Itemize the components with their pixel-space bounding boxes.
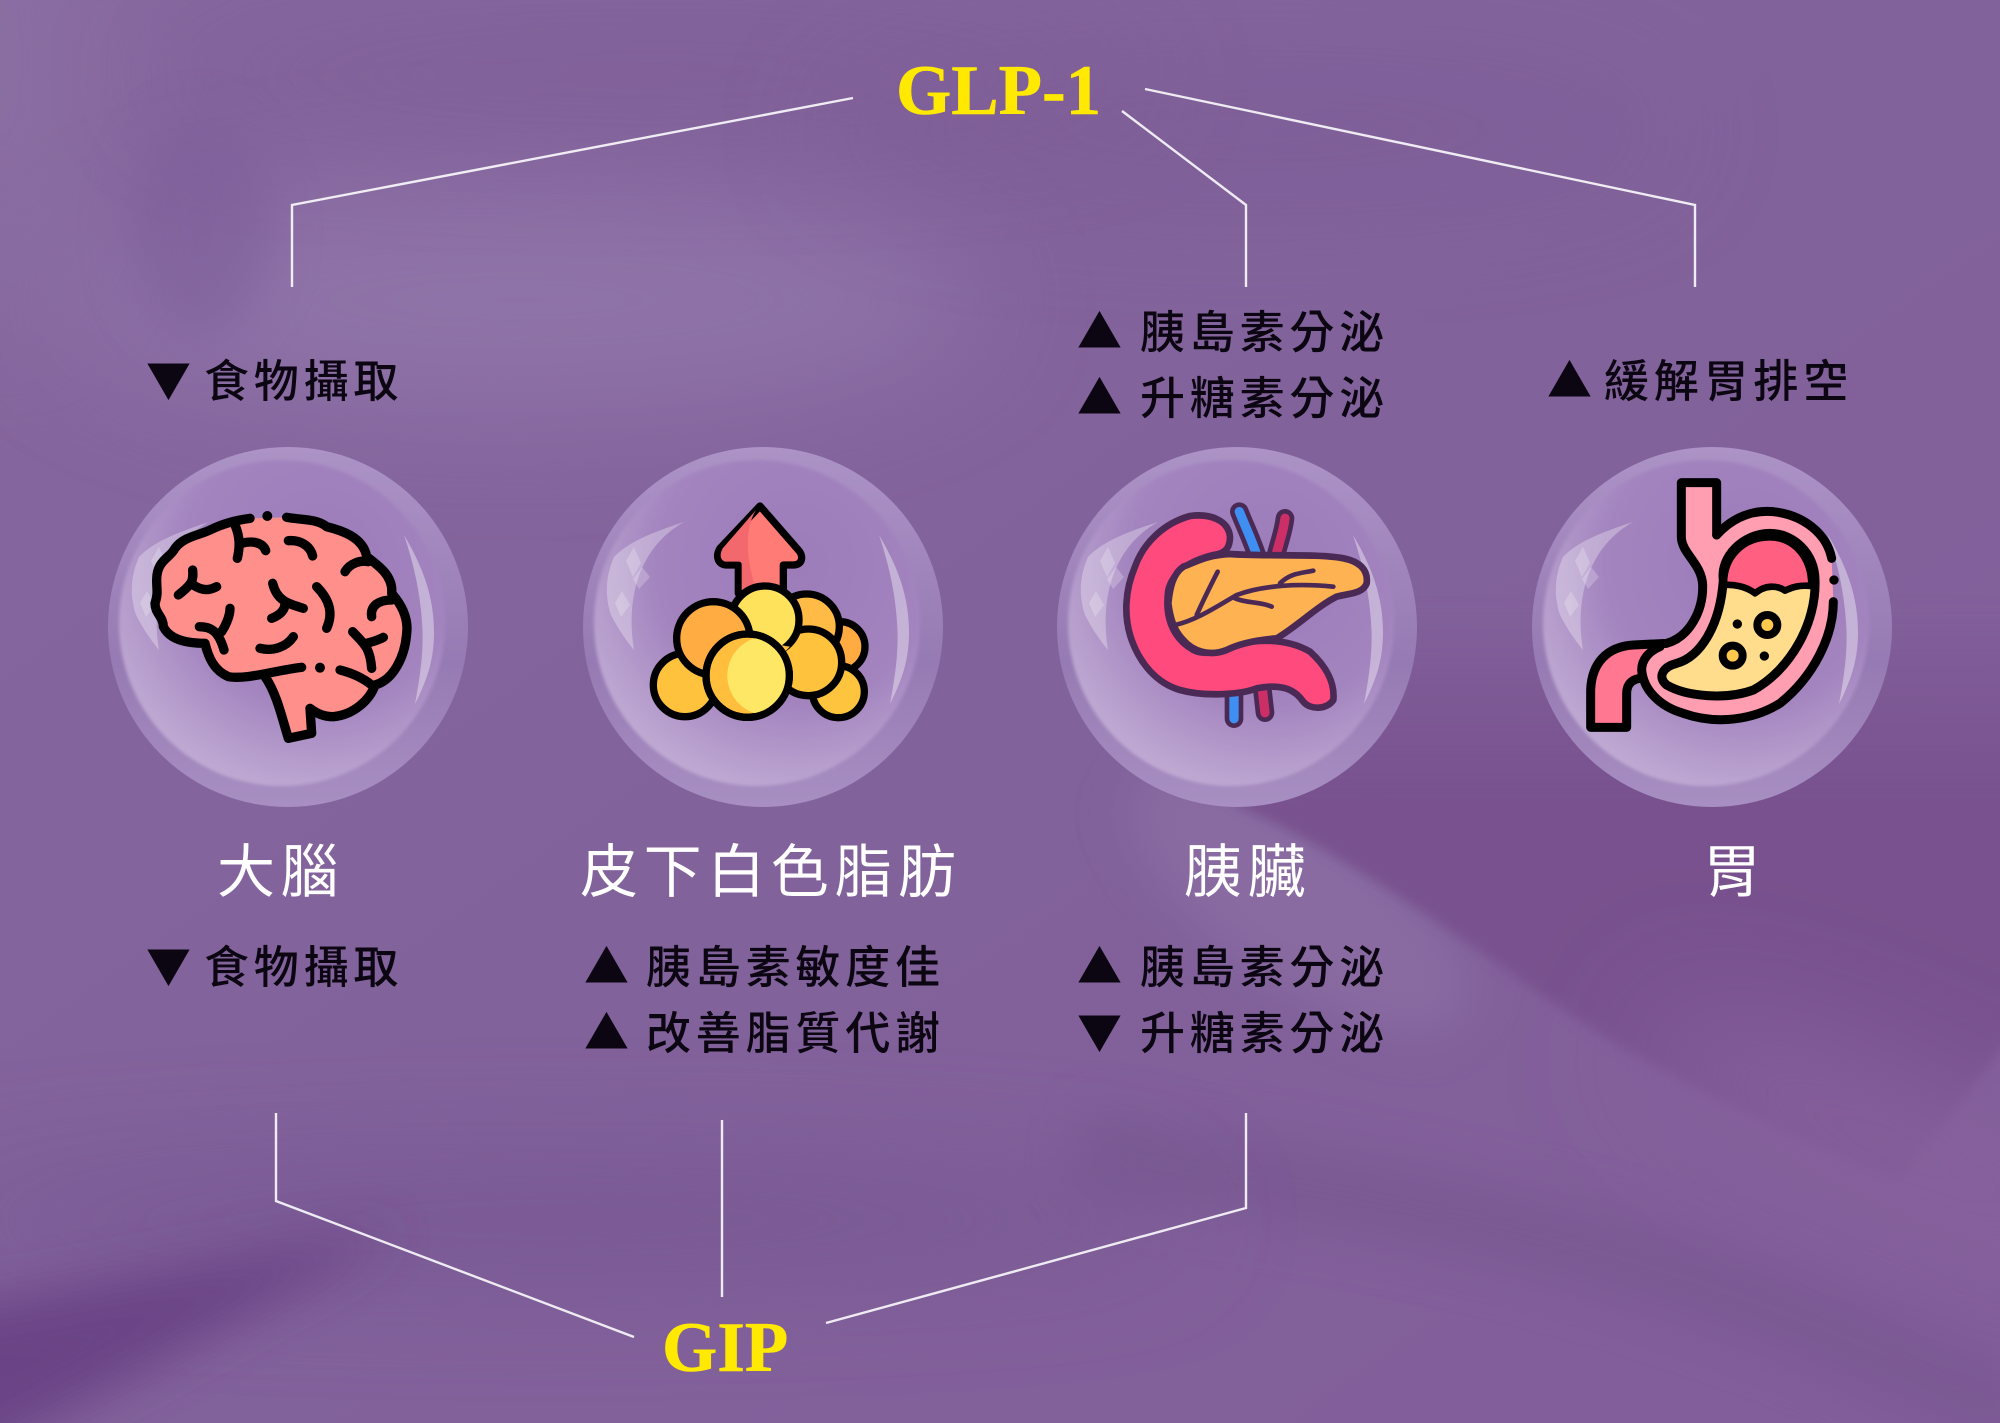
effect text: pancreas GIP insulin: ▲ bbox=[1077, 931, 1122, 996]
effect text: brain GIP: 食物攝取 bbox=[204, 942, 403, 993]
icon: stomach bbox=[1591, 483, 1839, 727]
bubble: subcutaneous white fat bbox=[583, 447, 943, 807]
label: stomach: 胃 bbox=[1703, 840, 1767, 905]
effect text: pancreas GIP insulin: 胰島素分泌 bbox=[1140, 942, 1389, 993]
effect text: pancreas GIP glucagon: ▼ bbox=[1077, 997, 1122, 1062]
label: brain: 大腦 bbox=[217, 840, 344, 905]
effect text: pancreas GIP glucagon: 升糖素分泌 bbox=[1140, 1008, 1389, 1059]
effect text: pancreas GLP-1 glucagon: ▲ bbox=[1077, 362, 1122, 427]
effect text: fat lipid metabolism: ▲ bbox=[584, 997, 629, 1062]
effect text: pancreas GLP-1 glucagon: 升糖素分泌 bbox=[1140, 373, 1389, 424]
effect text: brain GLP-1: ▼ bbox=[146, 345, 191, 410]
effect text: fat lipid metabolism: 改善脂質代謝 bbox=[646, 1008, 945, 1059]
icon: fat cells with arrow bbox=[653, 506, 865, 718]
effect text: fat insulin sensitivity: ▲ bbox=[584, 931, 629, 996]
bubble: stomach bbox=[1532, 447, 1892, 807]
effect text: brain GIP: ▼ bbox=[146, 931, 191, 996]
connector lines to GIP bbox=[276, 1113, 1246, 1337]
effect text: brain GLP-1: 食物攝取 bbox=[204, 356, 403, 407]
effect text: pancreas GLP-1 insulin: ▲ bbox=[1077, 296, 1122, 361]
effect text: fat insulin sensitivity: 胰島素敏度佳 bbox=[646, 942, 945, 993]
effect text: pancreas GLP-1 insulin: 胰島素分泌 bbox=[1140, 307, 1389, 358]
icon: pancreas bbox=[1126, 512, 1367, 719]
label: pancreas: 胰臟 bbox=[1184, 840, 1311, 905]
effect text: stomach GLP-1: 緩解胃排空 bbox=[1604, 356, 1853, 407]
icon: brain bbox=[155, 511, 407, 738]
connector lines from GLP-1 bbox=[292, 89, 1695, 287]
bubble: pancreas bbox=[1057, 447, 1417, 807]
title: GLP-1: GLP-1 bbox=[896, 52, 1101, 130]
label: subcutaneous white fat: 皮下白色脂肪 bbox=[580, 840, 962, 905]
effect text: stomach GLP-1: ▲ bbox=[1547, 345, 1592, 410]
title: GIP: GIP bbox=[662, 1309, 788, 1387]
bubble: brain bbox=[108, 447, 468, 807]
